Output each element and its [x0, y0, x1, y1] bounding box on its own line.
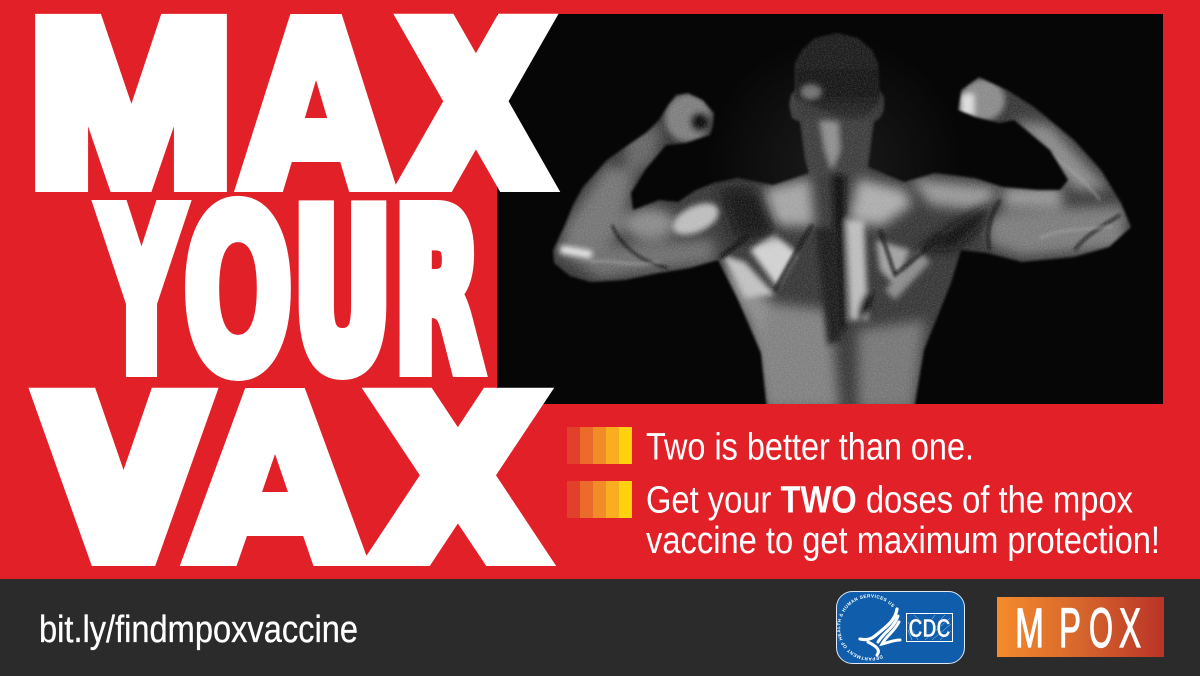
text: get your two doses: Get your TWO doses of the mpox	[646, 480, 1133, 522]
title: MAX YOUR VAX	[30, 0, 544, 613]
title line: VAX	[47, 350, 537, 613]
logo: MPOX: X	[1119, 596, 1141, 659]
title line: YOUR	[101, 163, 481, 424]
text: two is better than one: Two is better than one.	[646, 426, 974, 468]
logo: MPOX: O	[1089, 596, 1113, 659]
title line: YOUR: Y	[101, 168, 182, 417]
title line: VAX: A	[188, 350, 362, 613]
logo: HHS and CDC	[836, 591, 965, 664]
title line: YOUR: R	[395, 170, 481, 418]
CDC box: CDC	[908, 613, 951, 643]
hair	[794, 30, 880, 119]
HHS circular text: DEPARTMENT OF HEALTH & HUMAN SERVICES USA	[837, 594, 894, 661]
bullet two: gradient bar and text	[567, 480, 1160, 562]
footer link text: bit.ly/findmpoxvaccine	[39, 609, 358, 651]
icon: gradient bar two	[567, 481, 632, 518]
bullet one: gradient bar and text	[567, 426, 974, 468]
title line: YOUR: U	[294, 171, 391, 416]
icon: HHS eagle	[860, 609, 900, 655]
muscle separation lines	[612, 200, 1120, 290]
logo: MPOX: P	[1059, 596, 1081, 659]
footer bar	[0, 579, 1200, 676]
icon: gradient bar one	[567, 427, 632, 464]
title line: YOUR: O	[183, 163, 293, 424]
logo: MPOX	[997, 596, 1164, 659]
title line: VAX: V	[47, 362, 200, 601]
title line: VAX: X	[379, 358, 537, 603]
logo: MPOX: M	[1015, 596, 1044, 659]
title line: MAX	[30, 0, 544, 239]
photo panel: muscular man from behind flexing both arms	[497, 14, 1163, 410]
